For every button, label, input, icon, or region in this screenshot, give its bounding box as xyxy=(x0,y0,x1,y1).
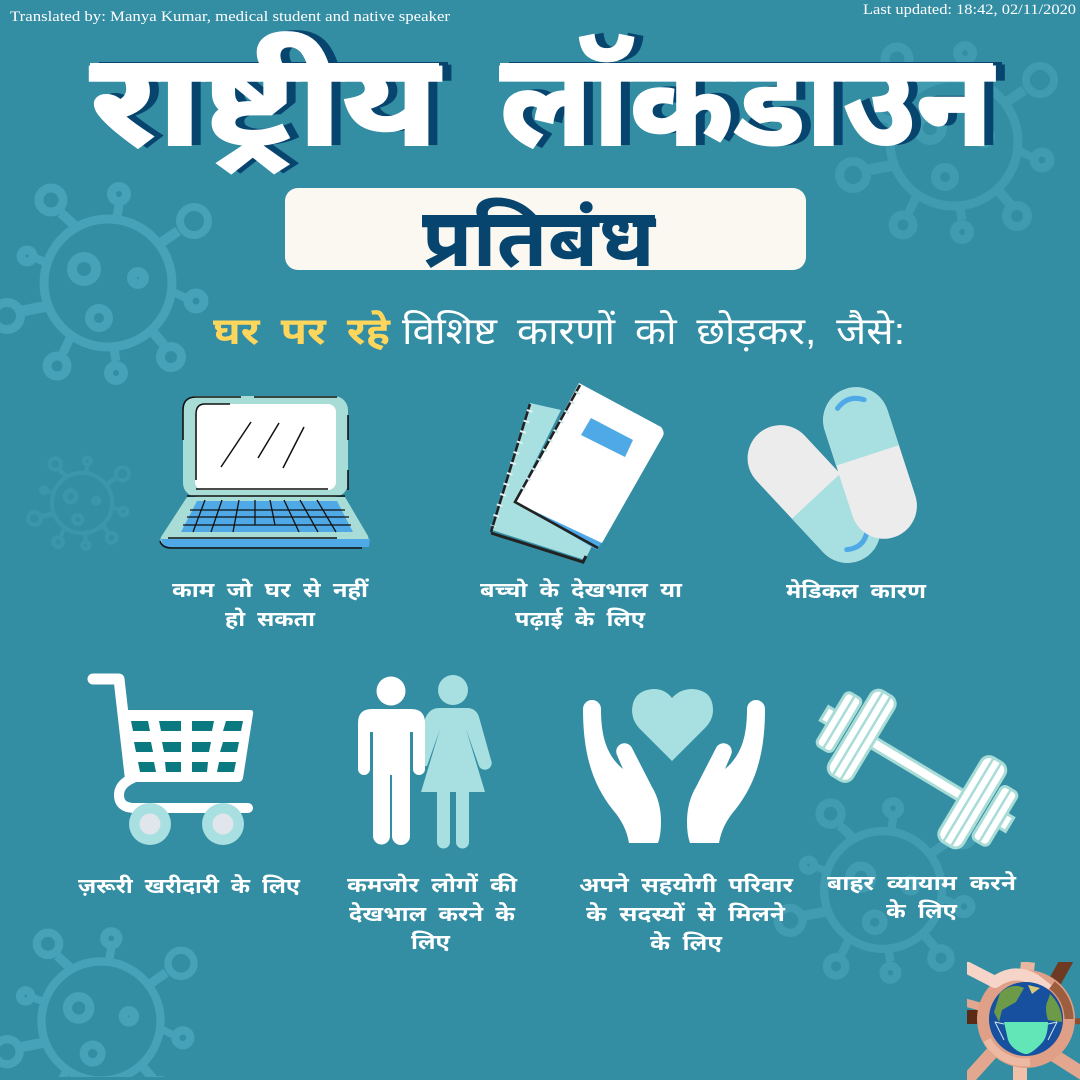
label: vulnerable people: लिए xyxy=(411,930,451,954)
label: essential shopping: ज़रूरी खरीदारी के लिए xyxy=(78,874,301,898)
title xyxy=(90,30,1004,174)
last updated: Last updated: 18:42, 02/11/2020 xyxy=(863,2,1076,18)
label: outdoor exercise: बाहर व्यायाम करने xyxy=(827,871,1017,895)
title: लॉकडाउन xyxy=(500,31,995,172)
subtitle box xyxy=(285,188,806,283)
icon: man and woman xyxy=(358,675,492,849)
instruction line xyxy=(213,309,905,353)
label: vulnerable people: देखभाल करने के xyxy=(349,902,516,926)
label: support family: अपने सहयोगी परिवार xyxy=(579,873,794,897)
icon: laptop xyxy=(160,396,370,548)
label: children and study: बच्चो के देखभाल या xyxy=(480,578,683,602)
icon: hands holding heart xyxy=(583,689,765,843)
label: outdoor exercise xyxy=(827,871,1017,923)
subtitle box: प्रतिबंध xyxy=(422,198,657,283)
label: vulnerable people xyxy=(347,873,518,954)
instruction line: घर पर रहे xyxy=(213,309,392,353)
icon: globe with mask in hands xyxy=(960,958,1080,1080)
credit line: Translated by: Manya Kumar, medical student and native speaker xyxy=(10,9,450,25)
label: children and study: पढ़ाई के लिए xyxy=(515,607,646,631)
title: राष्ट्रीय xyxy=(90,31,441,174)
icon: pills xyxy=(734,379,925,576)
instruction line: विशिष्ट कारणों को छोड़कर, जैसे: xyxy=(402,309,905,353)
label: medical: मेडिकल कारण xyxy=(786,579,927,603)
label: support family xyxy=(579,873,794,955)
title: राष्ट्रीय xyxy=(99,30,450,173)
label: work xyxy=(172,578,370,631)
icon: notebook xyxy=(491,383,664,562)
label: work: हो सकता xyxy=(225,607,316,631)
icon: dumbbell xyxy=(799,671,1035,867)
label: support family: के लिए xyxy=(650,931,723,955)
label: outdoor exercise: के लिए xyxy=(886,899,958,923)
label: vulnerable people: कमजोर लोगों की xyxy=(347,873,518,897)
title: लॉकडाउन xyxy=(509,30,1004,171)
label: children and study xyxy=(480,578,683,631)
icon: shopping cart xyxy=(93,679,253,845)
label: work: काम जो घर से नहीं xyxy=(172,578,370,602)
label: support family: के सदस्यों से मिलने xyxy=(586,902,786,926)
